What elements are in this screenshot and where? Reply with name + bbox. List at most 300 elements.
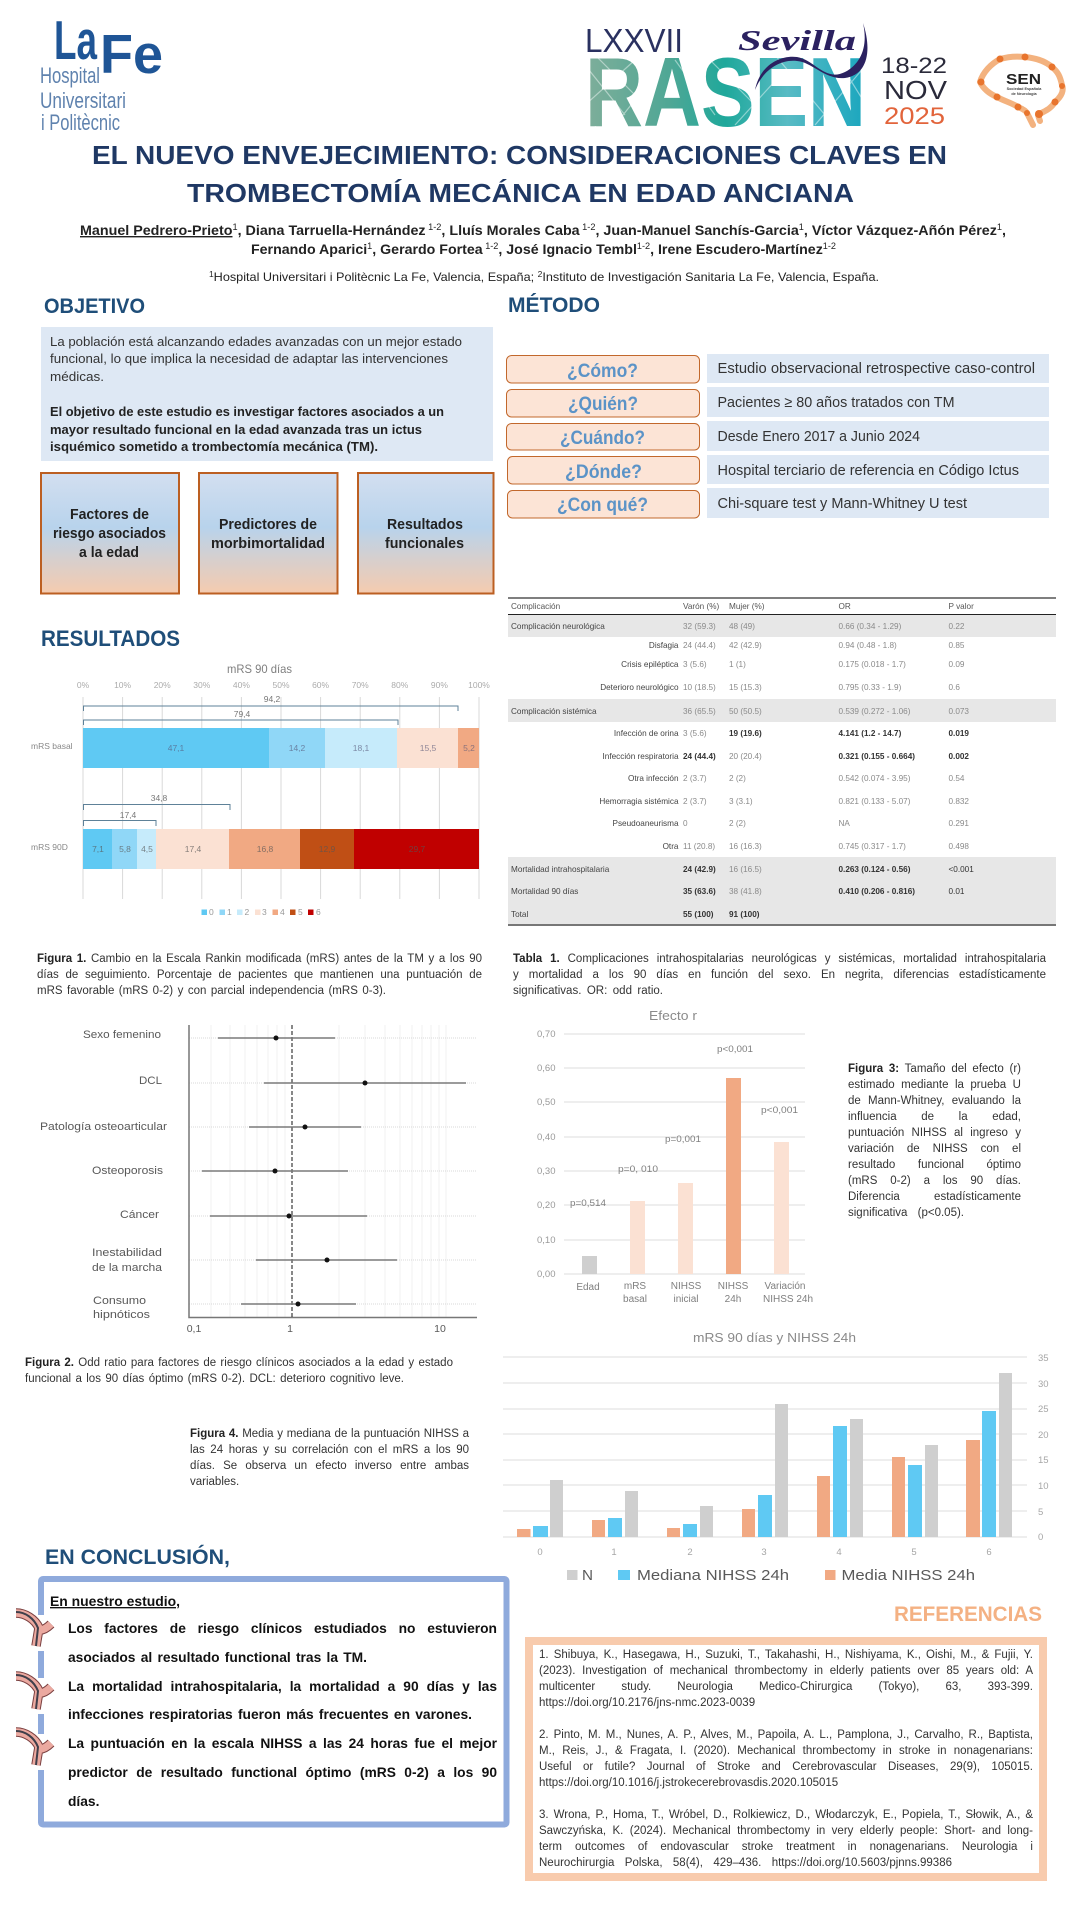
heading: resultados: RESULTADOS bbox=[41, 626, 180, 651]
table rows: 11 (20.8) bbox=[683, 842, 715, 851]
caption: tabla 1: significativas. OR: odd ratio. bbox=[513, 985, 663, 997]
table rows: 1 (1) bbox=[729, 660, 746, 669]
table header bbox=[511, 602, 974, 611]
table header: Mujer (%) bbox=[729, 602, 765, 611]
bars: N bbox=[550, 1373, 1012, 1537]
table rows: 0.019 bbox=[948, 729, 969, 738]
chart: figura 1 mRS stacked bars bbox=[31, 662, 490, 917]
panel: objetivo text: isquémico sometido a trombectomía mecánica (TM). bbox=[50, 439, 378, 454]
box: factores de riesgo: riesgo asociados bbox=[53, 526, 166, 542]
text: references: 3. Wrona, P., Homa, T., Wróbel, D., Rolkiewicz, D., Włodarczyk, E., Popiela, T., Słowik, A., & bbox=[539, 1809, 1033, 1821]
table rows: 4.141 (1.2 - 14.7) bbox=[838, 729, 902, 738]
category labels: inicial bbox=[673, 1294, 699, 1305]
caption: figura 4: las 24 horas y su correlación con el mRS a los 90 bbox=[190, 1444, 469, 1456]
caption: figura 3: (mRS 0-2) a los 90 días. bbox=[848, 1175, 1021, 1187]
category labels: NIHSS 24h bbox=[763, 1294, 813, 1305]
panel: conclusion box bbox=[41, 1579, 506, 1824]
category labels: Edad bbox=[576, 1282, 600, 1293]
caption: figura 4: días. Se observa un efecto inverso entre ambas bbox=[190, 1460, 469, 1472]
chart: figura 3 effect size bars: 0,20 bbox=[537, 1200, 556, 1211]
bar: mRS basal bbox=[31, 728, 479, 768]
table rows: 0 bbox=[683, 819, 688, 828]
authors: 1 bbox=[232, 222, 238, 232]
brackets bbox=[84, 706, 458, 826]
icon: vessel 2 bbox=[16, 1675, 51, 1714]
authors: Manuel Pedrero-Prieto bbox=[80, 222, 232, 238]
axis labels: 10 bbox=[434, 1323, 446, 1335]
table rows: 0.073 bbox=[948, 707, 969, 716]
bar: mRS 90D: 12,9 bbox=[319, 844, 336, 854]
category labels: Variación bbox=[765, 1281, 805, 1292]
legend: Media NIHSS 24h bbox=[842, 1567, 975, 1584]
p values: p=0,514 bbox=[570, 1198, 606, 1209]
table rows: 0.410 (0.206 - 0.816) bbox=[838, 887, 915, 896]
text: conclusions: asociados al resultado functional tras la TM. bbox=[68, 1650, 367, 1665]
chart: figura 3 effect size bars: 0,30 bbox=[537, 1166, 556, 1177]
table rows: 0.175 (0.018 - 1.7) bbox=[838, 660, 906, 669]
row: donde: Hospital terciario de referencia en Código Ictus bbox=[718, 462, 1019, 479]
panel: references frame bbox=[529, 1641, 1043, 1877]
logo: SEN: de Neurología bbox=[1011, 92, 1038, 96]
box: factores de riesgo: Factores de bbox=[70, 507, 149, 523]
chart: figura 3 effect size bars: Efecto r bbox=[649, 1008, 698, 1023]
category labels bbox=[576, 1281, 813, 1305]
row labels: Patología osteoarticular bbox=[40, 1121, 167, 1133]
affiliations: 2 bbox=[538, 270, 543, 279]
authors: 1 bbox=[367, 241, 372, 251]
chart: figura 1 mRS stacked bars: 40% bbox=[233, 680, 250, 690]
category labels: mRS bbox=[624, 1281, 646, 1292]
caption: tabla 1 bbox=[513, 953, 1046, 997]
row: quien: ¿Quién? bbox=[568, 394, 638, 415]
logo: LXXVII RASEN Sevilla: LXXVII bbox=[585, 22, 683, 59]
row labels: Cáncer bbox=[120, 1209, 159, 1221]
table header: Complicación bbox=[511, 602, 561, 611]
chart: figura 4 NIHSS grouped bars: 25 bbox=[1038, 1404, 1049, 1415]
caption: figura 3: estimado mediante la prueba U bbox=[848, 1079, 1021, 1091]
panel: conclusion box: En nuestro estudio, bbox=[50, 1594, 180, 1609]
text: conclusions bbox=[68, 1621, 497, 1809]
bar: mRS 90D: 5,8 bbox=[119, 844, 131, 854]
chart: figura 3 effect size bars bbox=[537, 1008, 813, 1305]
table rows: 16 (16.5) bbox=[729, 865, 762, 874]
category labels: NIHSS bbox=[671, 1281, 702, 1292]
text: references: multicenter study. Neurologia Medico-Chirurgica (Tokyo), 63, 393-399. bbox=[539, 1681, 1033, 1693]
category labels: 24h bbox=[725, 1294, 741, 1305]
logo: La Fe hospital: Universitari bbox=[40, 88, 126, 113]
p values: p<0,001 bbox=[717, 1044, 753, 1055]
text: conclusions: La puntuación en la escala NIHSS a las 24 horas fue el mejor bbox=[68, 1736, 497, 1751]
logo: SEN bbox=[978, 54, 1065, 125]
caption: figura 3: puntuación NIHSS al ingreso y bbox=[848, 1127, 1021, 1139]
p values: p=0, 010 bbox=[618, 1164, 658, 1175]
table rows: 0.85 bbox=[948, 641, 965, 650]
chart: figura 4 NIHSS grouped bars: 2 bbox=[687, 1547, 693, 1558]
caption: figura 2 bbox=[25, 1357, 453, 1385]
bar: mRS basal: 5,2 bbox=[463, 743, 475, 753]
table rows: 0.66 (0.34 - 1.29) bbox=[838, 622, 902, 631]
chart: figura 1 mRS stacked bars: 0% bbox=[77, 680, 90, 690]
table rows: Mortalidad intrahospitalaria bbox=[511, 865, 610, 874]
chart: figura 3 effect size bars: 0,10 bbox=[537, 1235, 556, 1246]
table rows: 55 (100) bbox=[683, 910, 714, 919]
box: resultados funcionales: funcionales bbox=[385, 536, 464, 552]
row labels bbox=[40, 1029, 167, 1321]
logo text: dates: 2025 bbox=[884, 103, 945, 130]
caption: figura 4: variables. bbox=[190, 1476, 239, 1488]
authors: , Juan-Manuel Sanchís-Garcia bbox=[595, 222, 799, 238]
bar: mRS 90D bbox=[31, 829, 479, 869]
table rows: Otra infección bbox=[628, 774, 679, 783]
bar: mRS 90D: 29,7 bbox=[409, 844, 426, 854]
chart: figura 3 effect size bars: 0,40 bbox=[537, 1132, 556, 1143]
caption: figura 3: Diferencia estadísticamente bbox=[848, 1191, 1021, 1203]
confidence intervals bbox=[202, 1038, 466, 1304]
row labels: DCL bbox=[139, 1075, 162, 1087]
chart: figura 1 mRS stacked bars: 17,4 bbox=[120, 810, 137, 820]
table rows: Total bbox=[511, 910, 528, 919]
table rows: 0.263 (0.124 - 0.56) bbox=[838, 865, 911, 874]
legend: 1 bbox=[227, 907, 232, 917]
legend: 3 bbox=[262, 907, 267, 917]
axis labels: 1 bbox=[287, 1323, 293, 1335]
caption: figura 2: Figura 2. Odd ratio para factores de riesgo clínicos asociados a la edad y estado bbox=[25, 1357, 453, 1369]
caption: figura 4 bbox=[190, 1428, 469, 1488]
bars: media bbox=[517, 1440, 980, 1537]
authors: 1-2 bbox=[637, 241, 650, 251]
chart: figura 4 NIHSS grouped bars: 30 bbox=[1038, 1379, 1049, 1390]
row: quien: Pacientes ≥ 80 años tratados con TM bbox=[718, 394, 954, 411]
box: predictores bbox=[199, 473, 338, 594]
caption: figura 3: resultado funcional óptimo bbox=[848, 1159, 1021, 1171]
logo: La Fe hospital bbox=[40, 9, 163, 135]
caption: figura 3: significativa (p<0.05). bbox=[848, 1207, 964, 1219]
category labels: NIHSS bbox=[718, 1281, 749, 1292]
text: references: M., Reis, J., & Fragata, I. (2020). Mechanical thrombectomy in stroke in nonagenarians: bbox=[539, 1745, 1033, 1757]
affiliations: 1 bbox=[209, 270, 214, 279]
authors: Fernando Aparici bbox=[251, 241, 366, 257]
text: conclusions: infecciones respiratorias fueron más frecuentes en varones. bbox=[68, 1707, 472, 1722]
text: references: Sawczyńska, K. (2024). Mechanical thrombectomy in very elderly people: Short- and long- bbox=[539, 1825, 1033, 1837]
logo text: dates bbox=[881, 53, 948, 130]
table rows bbox=[511, 622, 974, 919]
row: como: ¿Cómo? bbox=[567, 361, 638, 382]
table rows: 15 (15.3) bbox=[729, 683, 762, 692]
table rows: 19 (19.6) bbox=[729, 729, 762, 738]
table rows: 50 (50.5) bbox=[729, 707, 762, 716]
caption: figura 3: variación de NIHSS con el bbox=[848, 1143, 1021, 1155]
authors: , Gerardo Fortea bbox=[372, 241, 483, 257]
authors: 1-2 bbox=[823, 241, 836, 251]
text: references: https://doi.org/10.1016/j.jstrokecerebrovasdis.2020.105015 bbox=[539, 1777, 838, 1789]
chart: figura 1 mRS stacked bars: 70% bbox=[352, 680, 369, 690]
table rows: 0.321 (0.155 - 0.664) bbox=[838, 752, 915, 761]
table rows: 38 (41.8) bbox=[729, 887, 762, 896]
table 1 bbox=[508, 598, 1056, 925]
bar: mRS 90D: 4,5 bbox=[141, 844, 153, 854]
table rows: Pseudoaneurisma bbox=[612, 819, 679, 828]
text: references: https://doi.org/10.2176/jns-nmc.2023-0039 bbox=[539, 1697, 755, 1709]
chart: figura 4 NIHSS grouped bars bbox=[503, 1331, 1049, 1584]
legend bbox=[567, 1567, 975, 1584]
row: con que bbox=[508, 488, 1049, 518]
authors: , Diana Tarruella-Hernández bbox=[238, 222, 426, 238]
legend: 6 bbox=[316, 907, 321, 917]
icon: vessel 3 bbox=[16, 1731, 51, 1770]
authors bbox=[80, 222, 1006, 257]
table rows: 0.54 bbox=[948, 774, 965, 783]
authors: , José Ignacio Tembl bbox=[498, 241, 637, 257]
logo: LXXVII RASEN Sevilla: RASEN bbox=[585, 37, 866, 147]
chart: figura 4 NIHSS grouped bars: 5 bbox=[1038, 1507, 1043, 1518]
caption: figura 1: días de seguimiento. Porcentaje de pacientes que mantienen una puntuación de bbox=[37, 969, 482, 981]
authors: , Lluís Morales Caba bbox=[441, 222, 580, 238]
chart: figura 1 mRS stacked bars: 94,2 bbox=[264, 694, 281, 704]
table rows: 3 (5.6) bbox=[683, 660, 707, 669]
table rows: 24 (44.4) bbox=[683, 641, 716, 650]
row: quien bbox=[506, 387, 1049, 417]
caption: figura 4: Figura 4. Media y mediana de la puntuación NIHSS a bbox=[190, 1428, 469, 1440]
table rows: Complicación neurológica bbox=[511, 622, 605, 631]
logo: LXXVII RASEN Sevilla: Sevilla bbox=[738, 25, 856, 57]
text: references: 1. Shibuya, K., Hasegawa, H., Suzuki, T., Takahashi, H., Nishiyama, K., Oishi, M., & Fujii, Y. bbox=[539, 1649, 1033, 1661]
row: cuando bbox=[506, 421, 1049, 451]
chart: figura 3 effect size bars: 0,00 bbox=[537, 1269, 556, 1280]
caption: figura 2: funcional a los 90 días óptimo (mRS 0-2). DCL: deterioro cognitivo leve. bbox=[25, 1373, 404, 1385]
chart: figura 4 NIHSS grouped bars: 3 bbox=[761, 1547, 767, 1558]
table rows: Complicación sistémica bbox=[511, 707, 597, 716]
bar: mRS basal: 47,1 bbox=[168, 743, 185, 753]
box: resultados funcionales: Resultados bbox=[387, 517, 463, 533]
table rows: 35 (63.6) bbox=[683, 887, 716, 896]
chart: figura 4 NIHSS grouped bars: 35 bbox=[1038, 1353, 1049, 1364]
panel: objetivo text: mayor resultado funcional en la edad avanzada tras un ictus bbox=[50, 422, 422, 437]
logo: SEN: SEN bbox=[1006, 71, 1041, 88]
chart: figura 1 mRS stacked bars: 79,4 bbox=[234, 709, 251, 719]
authors: , bbox=[1002, 222, 1006, 238]
authors: 1-2 bbox=[483, 241, 498, 251]
affiliations: Hospital Universitari i Politècnic La Fe, Valencia, España; bbox=[214, 270, 538, 284]
chart: figura 1 mRS stacked bars: 90% bbox=[431, 680, 448, 690]
table rows: 0.745 (0.317 - 1.7) bbox=[838, 842, 906, 851]
title: EL NUEVO ENVEJECIMIENTO: CONSIDERACIONES CLAVES EN bbox=[92, 140, 947, 170]
table rows: 0.821 (0.133 - 5.07) bbox=[838, 797, 911, 806]
row labels: Sexo femenino bbox=[83, 1029, 161, 1041]
chart: figura 4 NIHSS grouped bars: 6 bbox=[986, 1547, 992, 1558]
table rows: NA bbox=[838, 819, 850, 828]
box: factores de riesgo bbox=[41, 473, 179, 594]
chart: figura 3 effect size bars: 0,70 bbox=[537, 1029, 556, 1040]
logo: SEN: Sociedad Española bbox=[1007, 87, 1042, 91]
chart: figura 1 mRS stacked bars: 10% bbox=[114, 680, 132, 690]
bar: mRS basal: 18,1 bbox=[353, 743, 370, 753]
chart: figura 4 NIHSS grouped bars: 10 bbox=[1038, 1481, 1049, 1492]
chart: figura 4 NIHSS grouped bars: 0 bbox=[1038, 1532, 1043, 1543]
box: predictores: Predictores de bbox=[219, 517, 317, 533]
logo text: dates: 18-22 bbox=[881, 53, 947, 78]
table rows: Deterioro neurológico bbox=[600, 683, 679, 692]
authors: 1 bbox=[997, 222, 1002, 232]
table rows: 2 (3.7) bbox=[683, 774, 707, 783]
bar: mRS basal: mRS basal bbox=[31, 741, 73, 751]
table rows: 2 (3.7) bbox=[683, 797, 707, 806]
table rows: 0.795 (0.33 - 1.9) bbox=[838, 683, 902, 692]
chart: figura 4 NIHSS grouped bars: 5 bbox=[911, 1547, 917, 1558]
chart: figura 4 NIHSS grouped bars: 4 bbox=[836, 1547, 842, 1558]
chart: figura 1 mRS stacked bars: 60% bbox=[312, 680, 330, 690]
bar: mRS basal: 14,2 bbox=[289, 743, 306, 753]
chart: figura 1 mRS stacked bars: 34,8 bbox=[151, 793, 168, 803]
table header: P valor bbox=[948, 602, 974, 611]
title bbox=[92, 140, 947, 208]
logo: La Fe hospital: i Politècnic bbox=[41, 110, 120, 135]
row labels: Inestabilidad bbox=[92, 1247, 162, 1259]
table rows: 3 (3.1) bbox=[729, 797, 753, 806]
authors: 1-2 bbox=[580, 222, 595, 232]
table rows: 24 (42.9) bbox=[683, 865, 716, 874]
legend: 0 bbox=[209, 907, 214, 917]
caption: figura 3: de Mann-Whitney, evaluando la bbox=[848, 1095, 1021, 1107]
row: cuando: ¿Cuándo? bbox=[560, 428, 645, 449]
heading: metodo: MÉTODO bbox=[508, 294, 600, 317]
odds ratio points bbox=[272, 1036, 368, 1306]
table rows: 48 (49) bbox=[729, 622, 755, 631]
text: references: Useful or futile? Journal of Stroke and Cerebrovascular Diseases, 29(9), 105015. bbox=[539, 1761, 1033, 1773]
table rows: 10 (18.5) bbox=[683, 683, 716, 692]
chart: figura 1 mRS stacked bars: 30% bbox=[193, 680, 211, 690]
authors: , Víctor Vázquez-Añón Pérez bbox=[804, 222, 997, 238]
bar: mRS 90D: 16,8 bbox=[257, 844, 274, 854]
table rows: 91 (100) bbox=[729, 910, 760, 919]
table rows: 20 (20.4) bbox=[729, 752, 762, 761]
table rows: <0.001 bbox=[948, 865, 974, 874]
category labels: basal bbox=[623, 1294, 647, 1305]
table rows: 0.539 (0.272 - 1.06) bbox=[838, 707, 911, 716]
heading: objetivo: OBJETIVO bbox=[44, 295, 145, 318]
panel: objetivo text: La población está alcanzando edades avanzadas con un mejor estado bbox=[50, 334, 462, 349]
legend: 5 bbox=[298, 907, 303, 917]
heading: en conclusion: EN CONCLUSIÓN, bbox=[45, 1545, 230, 1569]
table rows: 32 (59.3) bbox=[683, 622, 716, 631]
authors: 1-2 bbox=[426, 222, 441, 232]
panel: objetivo text: El objetivo de este estudio es investigar factores asociados a un bbox=[50, 404, 444, 419]
table rows: Crisis epiléptica bbox=[621, 660, 679, 669]
table rows: Infección de orina bbox=[614, 729, 679, 738]
axis labels: 0,1 bbox=[187, 1323, 201, 1335]
bar: mRS 90D: 7,1 bbox=[92, 844, 104, 854]
legend: Mediana NIHSS 24h bbox=[637, 1567, 789, 1584]
bar: mRS basal: 15,5 bbox=[420, 743, 437, 753]
table rows: 0.01 bbox=[948, 887, 965, 896]
table rows: 2 (2) bbox=[729, 774, 746, 783]
chart: figura 1 mRS stacked bars: 50% bbox=[272, 680, 290, 690]
box: factores de riesgo: a la edad bbox=[79, 545, 139, 561]
affiliations: Instituto de Investigación Sanitaria La Fe, Valencia, España. bbox=[542, 270, 879, 284]
icon: vessel 1 bbox=[16, 1612, 51, 1651]
text: references: 2. Pinto, M. M., Nunes, A. P., Alves, M., Papoila, A. L., Pamplona, J., Carvalho, R., Baptista, bbox=[539, 1729, 1033, 1741]
text: references: Neurochirurgia Polska, 58(4), 429–436. https://doi.org/10.5603/pjnns.99386 bbox=[539, 1857, 952, 1869]
row: cuando: Desde Enero 2017 a Junio 2024 bbox=[718, 428, 920, 445]
row: con que: ¿Con qué? bbox=[557, 495, 648, 516]
caption: figura 1: mRS favorable (mRS 0-2) y con parcial independencia (mRS 0-3). bbox=[37, 985, 386, 997]
table rows: 0.09 bbox=[948, 660, 965, 669]
chart: figura 3 effect size bars: 0,50 bbox=[537, 1097, 556, 1108]
title: TROMBECTOMÍA MECÁNICA EN EDAD ANCIANA bbox=[187, 178, 854, 208]
chart: figura 3 effect size bars: 0,60 bbox=[537, 1063, 556, 1074]
table rows: Otra bbox=[663, 842, 679, 851]
row labels: hipnóticos bbox=[93, 1309, 151, 1321]
text: conclusions: La mortalidad intrahospitalaria, la mortalidad a 90 días y las bbox=[68, 1679, 497, 1694]
table rows: 16 (16.3) bbox=[729, 842, 762, 851]
axis labels bbox=[187, 1323, 446, 1335]
caption: tabla 1: Tabla 1. Complicaciones intrahospitalarias neurológicas y sistémicas, mortalidad intrahospitalaria bbox=[513, 953, 1046, 965]
text: references bbox=[539, 1649, 1033, 1869]
panel: metodo rows bbox=[506, 354, 1049, 518]
legend bbox=[202, 907, 321, 917]
caption: tabla 1: y mortalidad a los 90 días en función del sexo. En negrita, diferencias estadísticamente bbox=[513, 969, 1046, 981]
row: donde: ¿Dónde? bbox=[565, 462, 642, 483]
logo: La Fe hospital: La bbox=[54, 9, 97, 71]
table rows: 0.498 bbox=[948, 842, 969, 851]
table rows: 0.94 (0.48 - 1.8) bbox=[838, 641, 897, 650]
table rows: 42 (42.9) bbox=[729, 641, 762, 650]
row: donde bbox=[508, 455, 1049, 484]
table rows: 36 (65.5) bbox=[683, 707, 716, 716]
caption: figura 1 bbox=[37, 953, 482, 997]
caption: figura 3 bbox=[848, 1063, 1021, 1219]
caption: figura 3: Figura 3: Tamaño del efecto (r) bbox=[848, 1063, 1021, 1075]
legend: 4 bbox=[280, 907, 285, 917]
legend: N bbox=[582, 1567, 593, 1584]
p values: p<0,001 bbox=[761, 1105, 798, 1116]
chart: figura 4 NIHSS grouped bars: 1 bbox=[611, 1547, 617, 1558]
table header: OR bbox=[838, 602, 851, 611]
table rows: 0.002 bbox=[948, 752, 969, 761]
text: references: (2023). Investigation of mechanical thrombectomy in elderly patients over 85 years old: A bbox=[539, 1665, 1033, 1677]
bar: mRS 90D: 17,4 bbox=[185, 844, 202, 854]
box: resultados funcionales bbox=[358, 473, 494, 594]
text: conclusions: días. bbox=[68, 1794, 99, 1809]
text: conclusions: predictor de resultado functional óptimo (mRS 0-2) a los 90 bbox=[68, 1765, 497, 1780]
text: references: term outcomes of endovascular stroke treatment in nonagenarians. Neurologia i bbox=[539, 1841, 1033, 1853]
row: con que: Chi-square test y Mann-Whitney U test bbox=[718, 495, 968, 512]
table header: Varón (%) bbox=[683, 602, 720, 611]
panel: objetivo text: médicas. bbox=[50, 369, 104, 384]
bar: mRS 90D: mRS 90D bbox=[31, 842, 68, 852]
authors: 1 bbox=[799, 222, 804, 232]
panel: objetivo text: funcional, lo que implica la necesidad de adaptar las intervenciones bbox=[50, 351, 448, 366]
logo: La Fe hospital: Fe bbox=[100, 23, 163, 85]
chart: figura 4 NIHSS grouped bars: 20 bbox=[1038, 1430, 1049, 1441]
panel: objetivo text bbox=[41, 327, 493, 461]
caption: figura 1: Figura 1. Cambio en la Escala Rankin modificada (mRS) antes de la TM y a los 90 bbox=[37, 953, 482, 965]
table rows: 0.832 bbox=[948, 797, 969, 806]
chart: figura 4 NIHSS grouped bars: 15 bbox=[1038, 1455, 1049, 1466]
table rows: Infección respiratoria bbox=[602, 752, 679, 761]
chart: figura 4 NIHSS grouped bars: mRS 90 días y NIHSS 24h bbox=[693, 1331, 856, 1345]
heading: referencias: REFERENCIAS bbox=[894, 1603, 1042, 1626]
row: como: Estudio observacional retrospective caso-control bbox=[718, 360, 1035, 377]
chart: figura 4 NIHSS grouped bars: 0 bbox=[537, 1547, 543, 1558]
chart: figura 1 mRS stacked bars: 80% bbox=[391, 680, 409, 690]
bars: mediana bbox=[533, 1411, 996, 1537]
table rows: 0.22 bbox=[948, 622, 965, 631]
chart: figura 1 mRS stacked bars: mRS 90 días bbox=[227, 662, 292, 676]
table rows: Disfagia bbox=[649, 641, 679, 650]
table rows: 2 (2) bbox=[729, 819, 746, 828]
row labels: Osteoporosis bbox=[92, 1165, 164, 1177]
p values: p=0,001 bbox=[665, 1134, 701, 1145]
